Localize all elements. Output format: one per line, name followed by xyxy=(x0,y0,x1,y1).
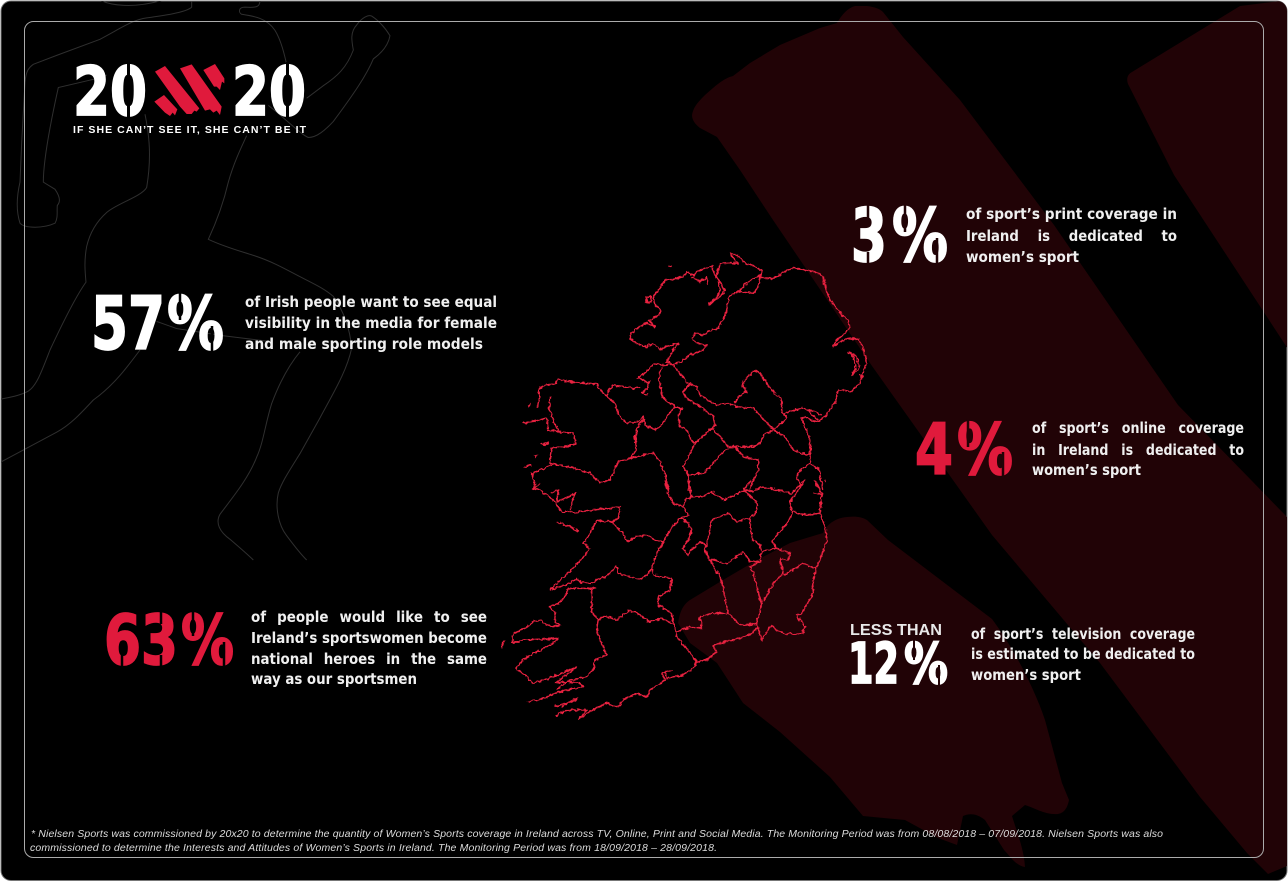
number 63%: % xyxy=(181,601,234,681)
description: visibility in the media for female xyxy=(245,314,497,332)
stat: 3% xyxy=(851,194,1177,279)
description: in Ireland is dedicated to xyxy=(1032,441,1244,459)
description: women’s sport xyxy=(966,248,1079,266)
logo red stripes xyxy=(154,64,224,116)
map: northern half xyxy=(523,253,867,490)
number 3%: % xyxy=(892,194,948,279)
stat: 63% xyxy=(104,601,487,688)
runner silhouette outline xyxy=(0,0,390,560)
map: southern half xyxy=(502,480,827,719)
footnote: commissioned to determine the Interests and Attitudes of Women’s Sports in Ireland. The Monitoring Period was from 18/09/2018 – 28/09/2018. xyxy=(30,842,717,854)
description: women’s sport xyxy=(1032,461,1141,479)
stat: 4% xyxy=(915,409,1244,491)
number 4%: % xyxy=(957,409,1013,491)
description: of sport’s television coverage xyxy=(971,625,1195,643)
stat: less than 12% xyxy=(848,622,1195,697)
number 12%: % xyxy=(904,632,948,697)
description: of sport’s online coverage xyxy=(1032,419,1244,437)
description: and male sporting role models xyxy=(245,335,483,353)
description: women’s sport xyxy=(971,666,1081,684)
logo right number: 20 xyxy=(232,53,306,132)
description: of people would like to see xyxy=(251,608,487,626)
logo tagline: IF SHE CAN’T SEE IT, SHE CAN’T BE IT xyxy=(73,124,307,136)
number 12%: 12 xyxy=(848,632,899,697)
footnote: * Nielsen Sports was commissioned by 20x20 to determine the quantity of Women’s Sports coverage in Ireland across TV, Online, Print and Social Media. The Monitoring Period was from 08/08/2018 – 07/09/2018. Nielsen Sports was also xyxy=(31,828,1163,840)
map of Ireland xyxy=(502,253,867,719)
description: of Irish people want to see equal xyxy=(245,293,497,311)
description: Ireland’s sportswomen become xyxy=(251,629,487,647)
number 3%: 3 xyxy=(851,194,887,279)
logo left number: 20 xyxy=(73,53,147,132)
number 57%: 57 xyxy=(91,282,165,367)
number 57%: % xyxy=(167,282,224,367)
description: way as our sportsmen xyxy=(251,670,417,688)
number 63%: 63 xyxy=(104,601,178,681)
description: of sport’s print coverage in xyxy=(966,205,1177,223)
number 3% xyxy=(851,194,948,279)
stat: 57% xyxy=(91,282,497,367)
number 4% xyxy=(915,409,1013,491)
description: Ireland is dedicated to xyxy=(966,227,1177,245)
description: national heroes in the same xyxy=(251,650,487,668)
logo: 20x20 xyxy=(73,53,307,136)
description: is estimated to be dedicated to xyxy=(971,645,1195,663)
label: less than: LESS THAN xyxy=(850,622,942,639)
number 4%: 4 xyxy=(915,409,953,491)
background brush strokes xyxy=(678,0,1288,874)
